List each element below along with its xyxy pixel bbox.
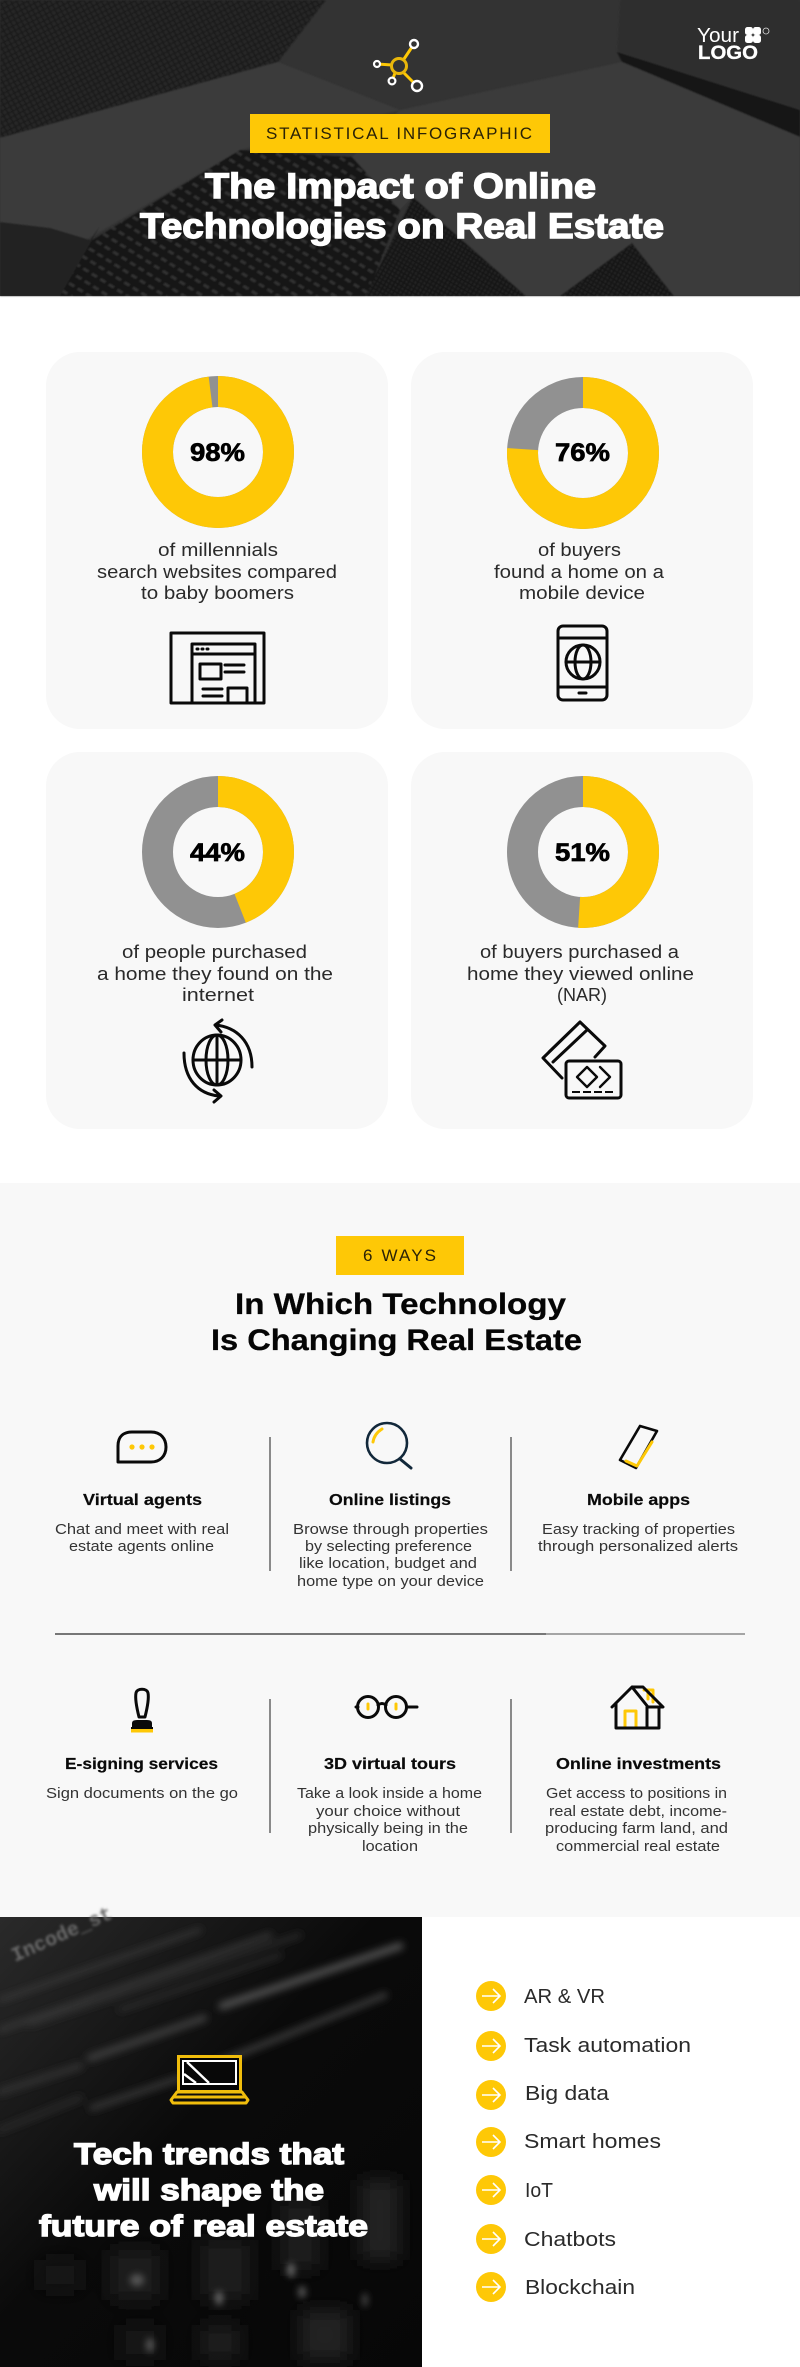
text: millennials: to baby boomers: [141, 583, 294, 603]
badge: 6 ways: 6 WAYS: [363, 1246, 436, 1265]
panel: 6 ways: [0, 1183, 800, 1917]
item: task automation: [476, 2031, 691, 2061]
heading: tech trends: [39, 2138, 368, 2243]
item: e-signing services: E-signing services: [65, 1756, 218, 1773]
text: mobile buyers: mobile device: [519, 583, 645, 603]
icon: website layout: [171, 633, 264, 703]
item: mobile apps: through personalized alerts: [538, 1539, 738, 1555]
heading: in which technology: Is Changing Real Estate: [211, 1324, 582, 1357]
item: AR & VR: [476, 1981, 605, 2011]
text: internet: a home they found on the: [97, 964, 333, 984]
item: online investments: Get access to positions in: [546, 1786, 727, 1802]
heading: in which technology: [211, 1288, 582, 1357]
logo: LOGO: [698, 43, 758, 64]
item: virtual agents: [55, 1432, 229, 1555]
title: Technologies on Real Estate: [140, 207, 664, 246]
text: internet: [97, 942, 333, 1005]
heading: in which technology: In Which Technology: [235, 1288, 566, 1321]
item: e-signing services: [46, 1689, 238, 1802]
text: millennials: [97, 540, 337, 603]
item: virtual agents: estate agents online: [69, 1539, 214, 1555]
text: millennials: of millennials: [158, 540, 278, 560]
item: online investments: Online investments: [556, 1756, 721, 1773]
donut chart: 51%: 51%: [555, 839, 610, 867]
heading: tech trends: future of real estate: [39, 2210, 368, 2243]
item: mobile apps: [538, 1426, 738, 1555]
item: e-signing services: Sign documents on the go: [46, 1786, 238, 1802]
badge: statistical infographic: [250, 114, 550, 153]
item: online listings: [293, 1423, 488, 1590]
item: 3D virtual tours: physically being in the: [308, 1821, 468, 1837]
text: viewed online: [467, 942, 694, 1005]
heading: tech trends: Tech trends that: [74, 2138, 344, 2171]
item: smart homes: [476, 2127, 661, 2157]
header panel: [0, 0, 800, 296]
text: viewed online: home they viewed online: [467, 964, 694, 984]
text: viewed online: (NAR): [557, 985, 607, 1005]
text: mobile buyers: [494, 540, 665, 603]
item: 3D virtual tours: location: [362, 1839, 418, 1855]
item: 3D virtual tours: 3D virtual tours: [324, 1756, 456, 1773]
heading: tech trends: will shape the: [93, 2174, 324, 2207]
donut chart: 76%: [522, 392, 644, 514]
item: online investments: producing farm land, and: [545, 1821, 728, 1837]
item: blockchain: [476, 2272, 635, 2302]
item: task automation: Task automation: [524, 2035, 691, 2057]
icon: credit cards: [543, 1022, 621, 1098]
text: millennials: search websites compared: [97, 562, 337, 582]
item: 3D virtual tours: Take a look inside a home: [297, 1786, 482, 1802]
panel: tech trends: [0, 1903, 422, 2367]
item: virtual agents: Virtual agents: [83, 1492, 202, 1509]
panel: 76% mobile: [411, 352, 753, 729]
photo text: code: Incode_st: [8, 1903, 117, 1968]
item: blockchain: Blockchain: [525, 2277, 635, 2299]
item: 3D virtual tours: your choice without: [316, 1804, 460, 1820]
item: online investments: [545, 1687, 728, 1855]
text: viewed online: of buyers purchased a: [480, 942, 680, 962]
donut chart: 76%: 76%: [555, 439, 610, 467]
item: 3D virtual tours: [297, 1696, 482, 1855]
item: online listings: home type on your device: [297, 1574, 484, 1590]
logo: [697, 25, 769, 64]
donut chart: 44%: [158, 792, 278, 912]
donut chart: 98%: [158, 392, 278, 512]
panel: 51% online: [411, 752, 753, 1129]
badge: statistical infographic: STATISTICAL INFOGRAPHIC: [266, 124, 532, 143]
list: trends: [422, 1917, 800, 2367]
donut chart: 44%: 44%: [190, 839, 245, 867]
logo: Your: [697, 25, 739, 47]
item: online listings: Browse through properties: [293, 1522, 488, 1538]
icon: rotating globe: [184, 1020, 252, 1102]
icon: network nodes: [374, 40, 422, 91]
icon: phone with globe: [558, 626, 607, 700]
item: chatbots: [476, 2224, 616, 2254]
item: IoT: IoT: [525, 2180, 553, 2202]
item: online listings: like location, budget and: [299, 1556, 477, 1572]
text: internet: of people purchased: [122, 942, 307, 962]
item: mobile apps: Easy tracking of properties: [542, 1522, 735, 1538]
title: [140, 167, 664, 246]
donut chart: 51%: [522, 792, 644, 912]
text: mobile buyers: found a home on a: [494, 562, 665, 582]
text: internet: internet: [182, 985, 254, 1005]
text: mobile buyers: of buyers: [538, 540, 621, 560]
item: mobile apps: Mobile apps: [587, 1492, 690, 1509]
item: virtual agents: Chat and meet with real: [55, 1522, 229, 1538]
item: online listings: Online listings: [329, 1492, 451, 1509]
item: AR & VR: AR & VR: [524, 1986, 605, 2008]
item: big data: [476, 2080, 610, 2110]
item: big data: Big data: [525, 2083, 610, 2105]
title: The Impact of Online: [205, 167, 596, 206]
icon: laptop: [171, 2056, 248, 2103]
item: online investments: commercial real estate: [556, 1839, 720, 1855]
item: online listings: by selecting preference: [305, 1539, 472, 1555]
item: online investments: real estate debt, income-: [549, 1804, 727, 1820]
panel: 44% internet: [46, 752, 388, 1129]
badge: 6 ways: [336, 1236, 464, 1275]
panel: 98% millennials: [46, 352, 388, 729]
item: IoT: [476, 2175, 553, 2205]
donut chart: 98%: 98%: [190, 439, 245, 467]
item: smart homes: Smart homes: [524, 2131, 661, 2153]
item: chatbots: Chatbots: [524, 2229, 616, 2251]
